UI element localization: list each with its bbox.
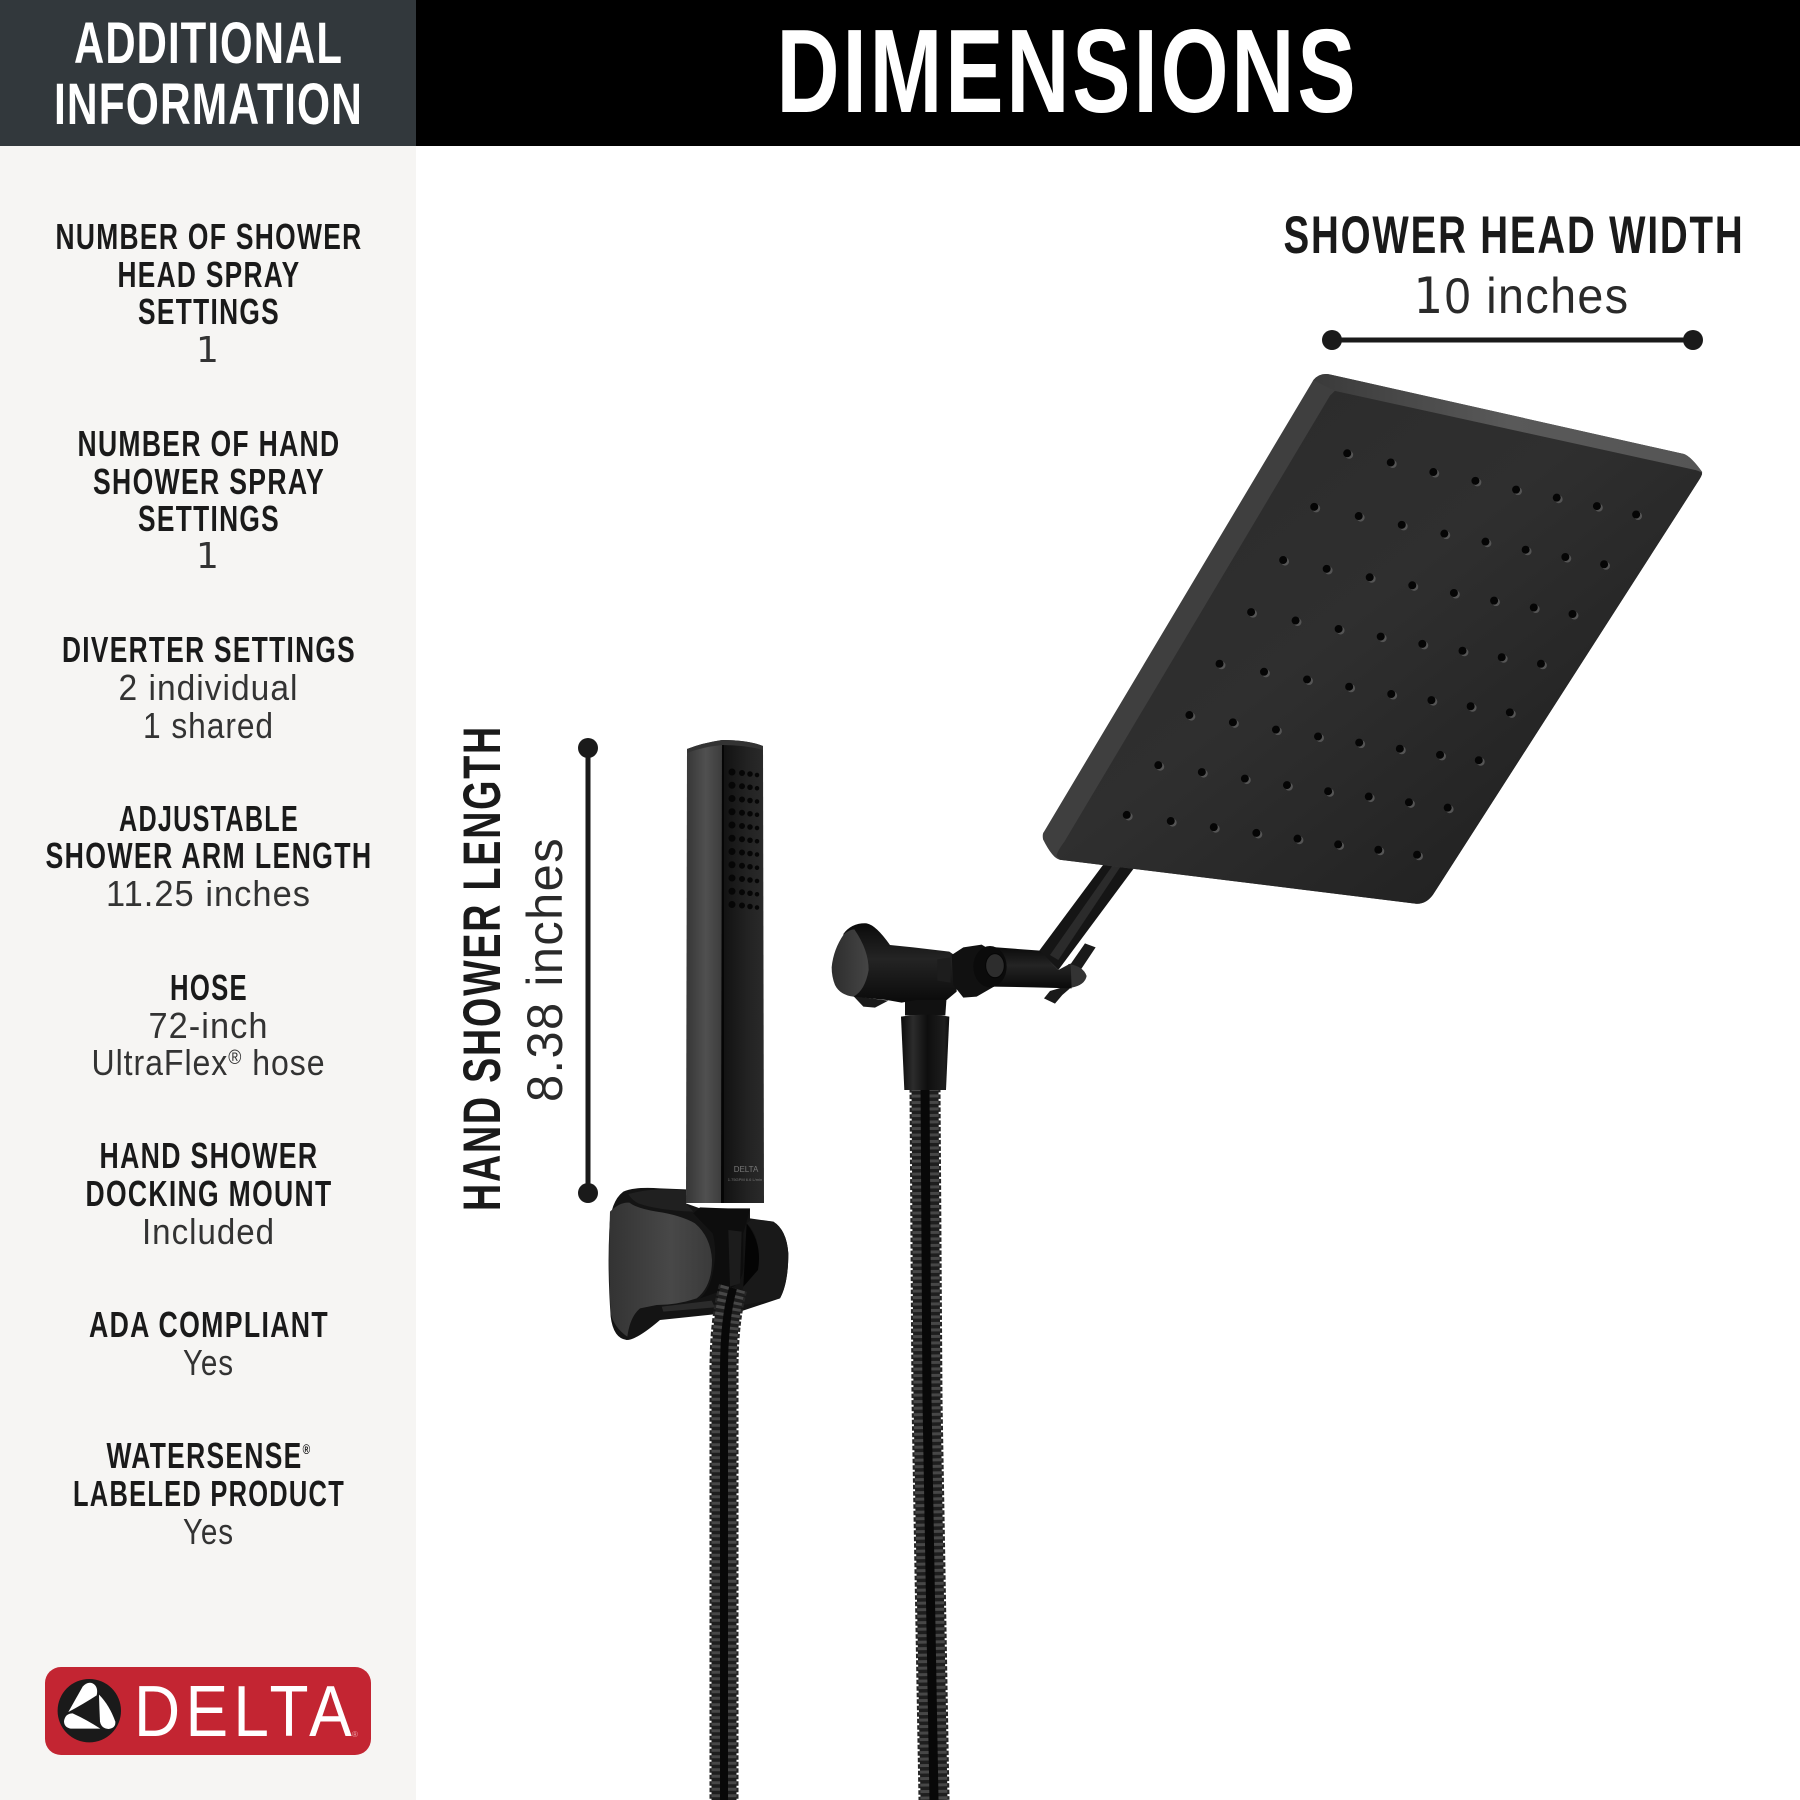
spec: diverter settings: DIVERTER SETTINGS	[62, 629, 356, 670]
hand shower engraved mark: 1.75GPM 6.6 L/min	[728, 1177, 762, 1182]
shower arm and wall connector	[832, 853, 1145, 1090]
hose: shower arm	[925, 1088, 934, 1800]
spec: hose	[92, 967, 326, 1083]
dimension label: hand shower length	[453, 725, 573, 1211]
front face	[1056, 391, 1702, 904]
spec: diverter settings	[62, 629, 356, 746]
spec: watersense labeled product	[73, 1435, 345, 1552]
delta logo	[45, 1667, 371, 1755]
main body	[843, 923, 957, 1003]
spec: hose: 72-inch	[148, 1005, 268, 1046]
right knob	[738, 1219, 788, 1306]
dimension label: hand shower length: HAND SHOWER LENGTH	[453, 725, 512, 1211]
side face	[686, 740, 722, 1203]
dimension label: shower head width: 10 inches	[1414, 267, 1630, 325]
spec: number of hand shower spray settings: NUMBER OF HAND	[78, 423, 340, 464]
sidebar background panel	[0, 146, 416, 1800]
spec: watersense labeled product: WATERSENSE	[106, 1435, 374, 1476]
spray nozzles	[732, 772, 757, 908]
spec: hand shower docking mount	[86, 1135, 332, 1252]
hand shower	[686, 740, 764, 1203]
foot lug	[853, 996, 888, 1008]
knob face	[832, 929, 869, 997]
spec: hose: hose	[242, 1042, 326, 1083]
dimension label: shower head width	[1284, 206, 1744, 325]
spec: watersense labeled product: LABELED PRODUCT	[73, 1473, 345, 1514]
locking pins	[1068, 943, 1096, 973]
spec: hose: HOSE	[170, 967, 248, 1008]
hand shower docking mount	[609, 1188, 788, 1340]
spec: number of hand shower spray settings	[78, 423, 340, 577]
spray holes	[1127, 453, 1638, 856]
spec: diverter settings: 2 individual	[118, 667, 298, 708]
spec: number of hand shower spray settings: 1	[196, 536, 220, 577]
spec: adjustable shower arm length: 11.25 inches	[106, 873, 311, 914]
spec: number of shower head spray settings	[56, 216, 362, 371]
hex joint	[952, 945, 994, 998]
header: dimensions title	[416, 0, 1800, 146]
hand shower engraved mark	[728, 1165, 762, 1182]
neck	[905, 997, 947, 1015]
spec: hose: UltraFlex	[92, 1042, 245, 1083]
spec: number of hand shower spray settings: SETTINGS	[138, 498, 280, 539]
spec: number of shower head spray settings: SETTINGS	[138, 291, 280, 332]
spec: number of shower head spray settings: 1	[196, 330, 220, 371]
spray face	[722, 740, 764, 1203]
dock gray face	[609, 1203, 712, 1337]
spec: number of hand shower spray settings: SHOWER SPRAY	[93, 461, 325, 502]
spec: ada compliant: Yes	[183, 1342, 234, 1383]
sleeve	[693, 1207, 750, 1298]
angled arm	[1039, 853, 1145, 970]
delta logo: ®	[352, 1730, 358, 1739]
dimension line: shower head width	[1322, 330, 1703, 350]
spec: adjustable shower arm length: SHOWER ARM LENGTH	[46, 835, 372, 876]
shower head	[1043, 374, 1702, 904]
header: additional information: INFORMATION	[54, 72, 363, 137]
shower head body	[1043, 374, 1702, 904]
spec: adjustable shower arm length: ADJUSTABLE	[119, 798, 299, 839]
spec: hose: ®	[228, 1047, 242, 1069]
spec: hand shower docking mount: HAND SHOWER	[100, 1135, 318, 1176]
header: additional information	[0, 0, 416, 146]
header: dimensions title: DIMENSIONS	[776, 5, 1358, 138]
top cap	[687, 740, 763, 753]
dimension label: hand shower length: 8.38 inches	[517, 837, 573, 1102]
collar	[901, 1015, 949, 1090]
hand shower engraved mark: DELTA	[734, 1165, 759, 1174]
spec: hand shower docking mount: DOCKING MOUNT	[86, 1173, 332, 1214]
spec: ada compliant: ADA COMPLIANT	[89, 1304, 329, 1345]
spec: number of shower head spray settings: HEAD SPRAY	[118, 254, 300, 295]
spec: adjustable shower arm length	[46, 798, 372, 914]
header: additional information: ADDITIONAL	[74, 11, 343, 76]
horizontal bar	[987, 947, 1072, 988]
lower slot	[662, 1301, 715, 1312]
hose: hand shower	[724, 1288, 733, 1800]
dock base silhouette	[609, 1188, 788, 1340]
swivel boss	[973, 946, 1007, 987]
spec: diverter settings: 1 shared	[143, 705, 274, 746]
spec: number of shower head spray settings: NUMBER OF SHOWER	[56, 216, 362, 257]
top bevel	[1313, 374, 1702, 472]
spec: watersense labeled product: ®	[303, 1441, 312, 1457]
delta logo: DELTA	[134, 1672, 357, 1752]
spec: ada compliant	[89, 1304, 329, 1383]
top crescent highlight	[628, 1189, 693, 1212]
spec: hand shower docking mount: Included	[142, 1211, 275, 1252]
dimension line: hand shower length	[578, 738, 598, 1203]
spec: watersense labeled product: Yes	[183, 1511, 234, 1552]
